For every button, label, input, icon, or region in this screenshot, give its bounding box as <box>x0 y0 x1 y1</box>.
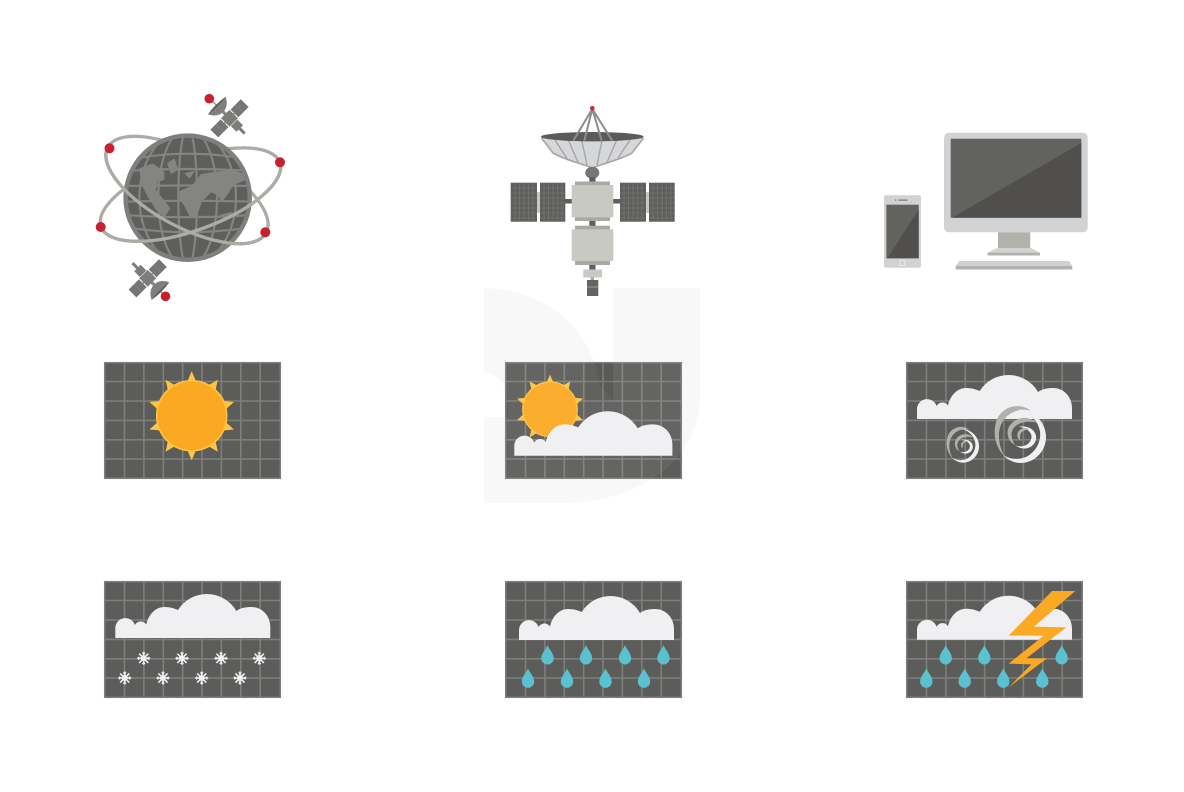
icon: globe with orbits and satellites <box>96 94 285 302</box>
monitor <box>944 133 1088 256</box>
panel: snow <box>104 581 281 698</box>
icon: computer and phone <box>884 133 1088 270</box>
satellite top <box>196 85 260 149</box>
icon: cloud <box>514 411 672 456</box>
icon: large satellite <box>511 106 675 296</box>
icon: cloud <box>917 375 1072 419</box>
antenna tip <box>590 106 595 111</box>
tail block <box>583 270 602 278</box>
satellite bottom <box>117 248 181 312</box>
icon: lightning bolt <box>1009 591 1075 687</box>
icon: sun <box>148 371 236 460</box>
watermark <box>484 288 700 503</box>
antenna dish bowl <box>541 137 644 168</box>
neck <box>585 167 599 179</box>
solar panels <box>511 183 675 222</box>
orbit rings behind globe <box>89 115 292 265</box>
body module upper <box>572 182 613 221</box>
orbit markers <box>96 143 285 237</box>
panel: sunny <box>104 362 281 479</box>
connectors <box>565 177 620 270</box>
snowflakes <box>118 652 266 684</box>
phone <box>884 195 921 268</box>
raindrops <box>522 645 670 688</box>
icon: sun behind cloud <box>516 375 584 444</box>
panel: rain <box>505 581 682 698</box>
thruster <box>587 280 598 296</box>
raindrops <box>920 645 1068 688</box>
tail stem <box>590 278 594 280</box>
watermark overlay on panel <box>517 375 582 437</box>
antenna mast <box>573 109 612 141</box>
icon: cloud <box>115 594 270 638</box>
panel: partly cloudy <box>505 362 682 479</box>
panel: thunderstorm <box>906 581 1083 698</box>
icon: wind swirls <box>947 406 1046 463</box>
solar arms <box>537 192 649 213</box>
icon: cloud <box>519 596 674 640</box>
icon: cloud <box>917 596 1072 640</box>
globe <box>123 128 253 268</box>
body module lower <box>572 226 613 265</box>
antenna dish rim <box>541 132 644 141</box>
orbit rings in front of globe <box>90 147 292 265</box>
keyboard <box>956 261 1072 270</box>
panel: windy <box>906 362 1083 479</box>
